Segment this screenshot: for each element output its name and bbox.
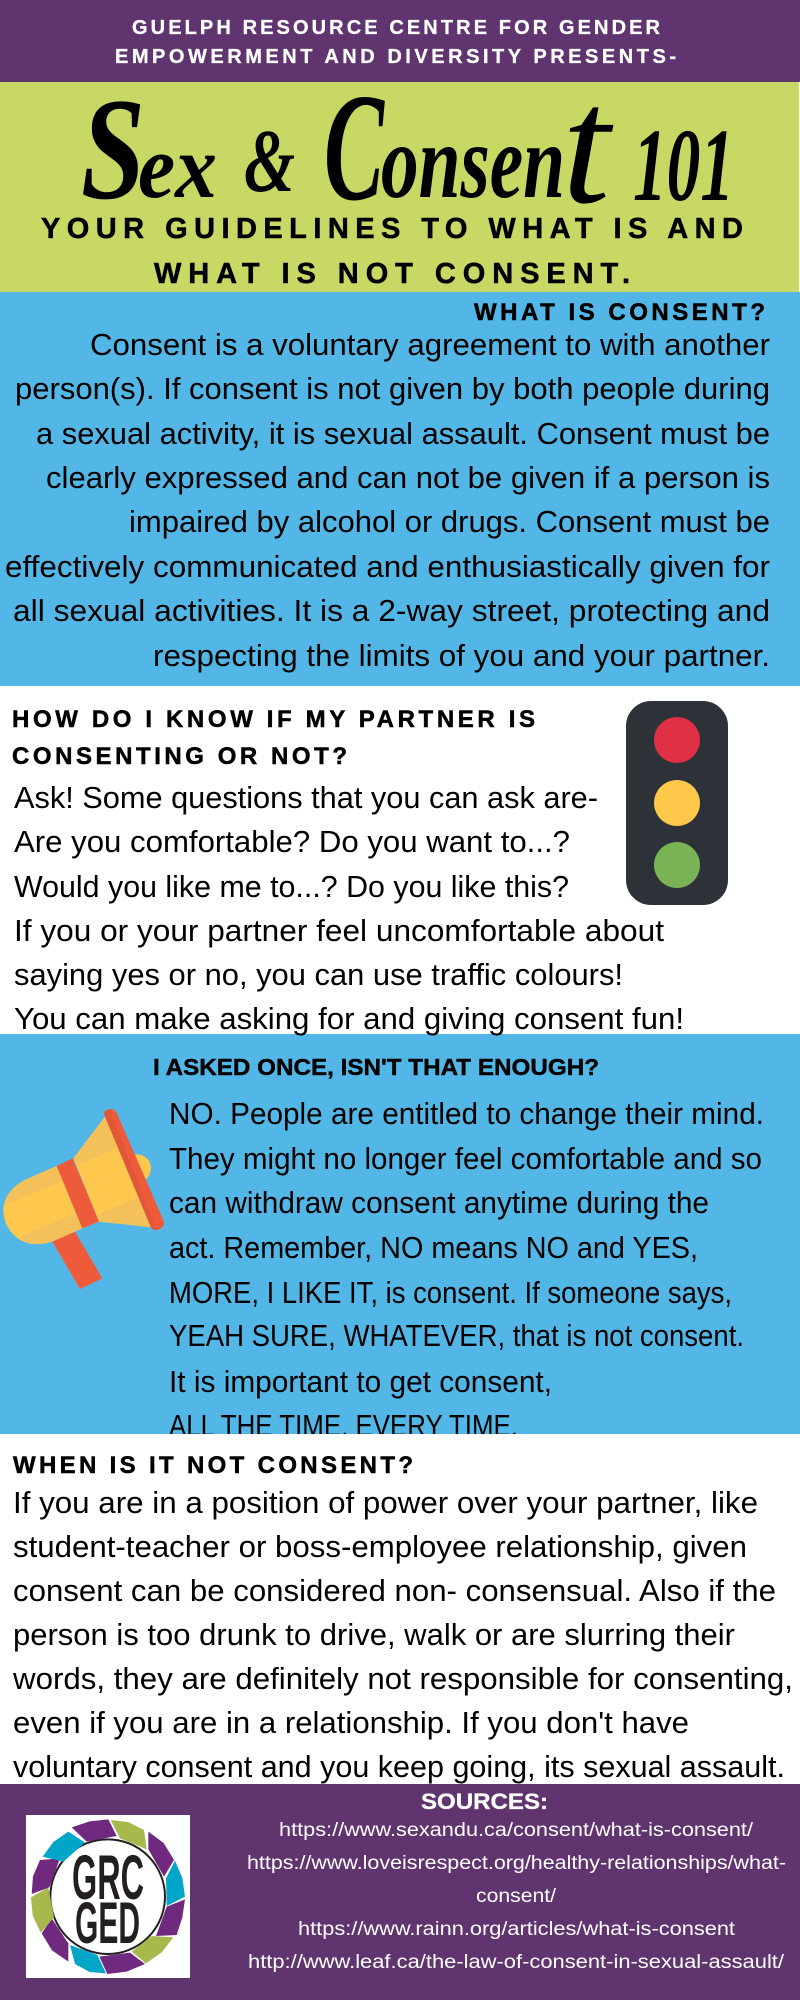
heading: how do i know — [12, 706, 535, 770]
body text: how do i know: Are you comfortable? Do you want to...? — [14, 824, 570, 859]
sources list: http://www.leaf.ca/the-law-of-consent-in-sexual-assault/ — [248, 1952, 785, 1973]
body text: how do i know — [14, 780, 684, 1036]
heading: i asked once: I ASKED ONCE, ISN'T THAT ENOUGH? — [153, 1054, 599, 1080]
header presenter text: GUELPH RESOURCE CENTRE FOR GENDER — [132, 17, 661, 39]
body text: i asked once: It is important to get consent, — [169, 1364, 552, 1399]
body text: what is consent: a sexual activity, it is sexual assault. Consent must be — [36, 416, 770, 451]
body text: i asked once: MORE, I LIKE IT, is consent. If someone says, — [169, 1275, 732, 1310]
sources list — [247, 1820, 786, 1973]
heading: when is it not consent: WHEN IS IT NOT CONSENT? — [13, 1452, 413, 1479]
panel: how do i know — [0, 686, 800, 1036]
body text: i asked once — [169, 1096, 764, 1443]
logo: GRC GED — [26, 1815, 190, 1978]
sources list: consent/ — [476, 1886, 557, 1907]
body text: i asked once: can withdraw consent anytime during the — [169, 1185, 709, 1220]
body text: when is it not consent: student-teacher or boss-employee relationship, given — [13, 1529, 747, 1564]
panel: when is it not consent — [0, 1434, 800, 1784]
title: Sex & Consent 101: & — [244, 112, 295, 211]
sources heading: SOURCES: — [421, 1789, 548, 1814]
body text: what is consent: respecting the limits of you and your partner. — [153, 638, 770, 673]
body text: when is it not consent: consent can be considered non- consensual. Also if the — [13, 1573, 776, 1608]
body text: when is it not consent: words, they are definitely not responsible for consenting, — [12, 1661, 793, 1696]
body text: what is consent: person(s). If consent is not given by both people during — [15, 371, 770, 406]
body text: how do i know: saying yes or no, you can use traffic colours! — [14, 957, 623, 992]
title: Sex & Consent 101: onsen — [381, 103, 565, 220]
body text: what is consent: clearly expressed and can not be given if a person is — [46, 460, 770, 495]
body text: when is it not consent: even if you are in a relationship. If you don't have — [13, 1705, 689, 1740]
body text: what is consent: effectively communicated and enthusiastically given for — [5, 549, 770, 584]
body text: how do i know: Ask! Some questions that you can ask are- — [14, 780, 598, 815]
header presenter text: EMPOWERMENT AND DIVERSITY PRESENTS- — [115, 46, 676, 68]
title panel — [0, 53, 799, 292]
logo: GRC GED: GRC — [72, 1843, 144, 1913]
body text: when is it not consent: If you are in a position of power over your partner, like — [13, 1485, 758, 1520]
body text: what is consent: impaired by alcohol or drugs. Consent must be — [129, 504, 770, 539]
body text: i asked once: YEAH SURE, WHATEVER, that is not consent. — [169, 1318, 744, 1353]
icon: traffic light — [626, 701, 728, 905]
body text: i asked once: They might no longer feel comfortable and so — [169, 1141, 762, 1176]
body text: when is it not consent: person is too drunk to drive, walk or are slurring their — [13, 1617, 735, 1652]
sources list: https://www.loveisrespect.org/healthy-relationships/what- — [247, 1853, 786, 1874]
panel: i asked once — [0, 1034, 800, 1443]
heading: how do i know: HOW DO I KNOW IF MY PARTNER IS — [12, 706, 535, 733]
body text: how do i know: If you or your partner feel uncomfortable about — [14, 913, 664, 948]
subtitle: WHAT IS NOT CONSENT. — [154, 258, 630, 290]
title: Sex & Consent 101: C — [324, 63, 385, 233]
title: Sex & Consent 101: ex — [138, 118, 217, 217]
header banner — [0, 0, 800, 82]
panel: what is consent — [0, 292, 800, 686]
body text: i asked once: act. Remember, NO means NO and YES, — [169, 1230, 698, 1265]
body text: what is consent: all sexual activities. It is a 2-way street, protecting and — [13, 593, 770, 628]
body text: what is consent — [5, 327, 770, 673]
body text: i asked once: NO. People are entitled to change their mind. — [169, 1096, 764, 1131]
title: Sex & Consent 101 — [81, 53, 734, 239]
body text: when is it not consent — [12, 1485, 793, 1784]
title: Sex & Consent 101: 101 — [633, 108, 734, 223]
body text: when is it not consent: voluntary consent and you keep going, its sexual assault. — [13, 1749, 785, 1784]
body text: how do i know: You can make asking for and giving consent fun! — [14, 1001, 684, 1036]
header presenter text — [115, 17, 676, 68]
sources list: https://www.rainn.org/articles/what-is-consent — [298, 1919, 736, 1940]
heading: what is consent: WHAT IS CONSENT? — [474, 299, 765, 326]
title: Sex & Consent 101: t — [562, 53, 614, 239]
title: Sex & Consent 101: S — [81, 68, 145, 230]
sources list: https://www.sexandu.ca/consent/what-is-consent/ — [279, 1820, 754, 1841]
body text: what is consent: Consent is a voluntary agreement to with another — [90, 327, 770, 362]
logo: GRC GED: GED — [75, 1891, 140, 1956]
heading: how do i know: CONSENTING OR NOT? — [12, 743, 347, 770]
body text: how do i know: Would you like me to...? Do you like this? — [14, 869, 569, 904]
subtitle — [41, 213, 743, 290]
subtitle: YOUR GUIDELINES TO WHAT IS AND — [41, 213, 743, 245]
footer panel — [0, 1784, 800, 2000]
icon: megaphone — [3, 1109, 164, 1289]
body text: i asked once: ALL THE TIME, EVERY TIME. — [169, 1408, 518, 1443]
